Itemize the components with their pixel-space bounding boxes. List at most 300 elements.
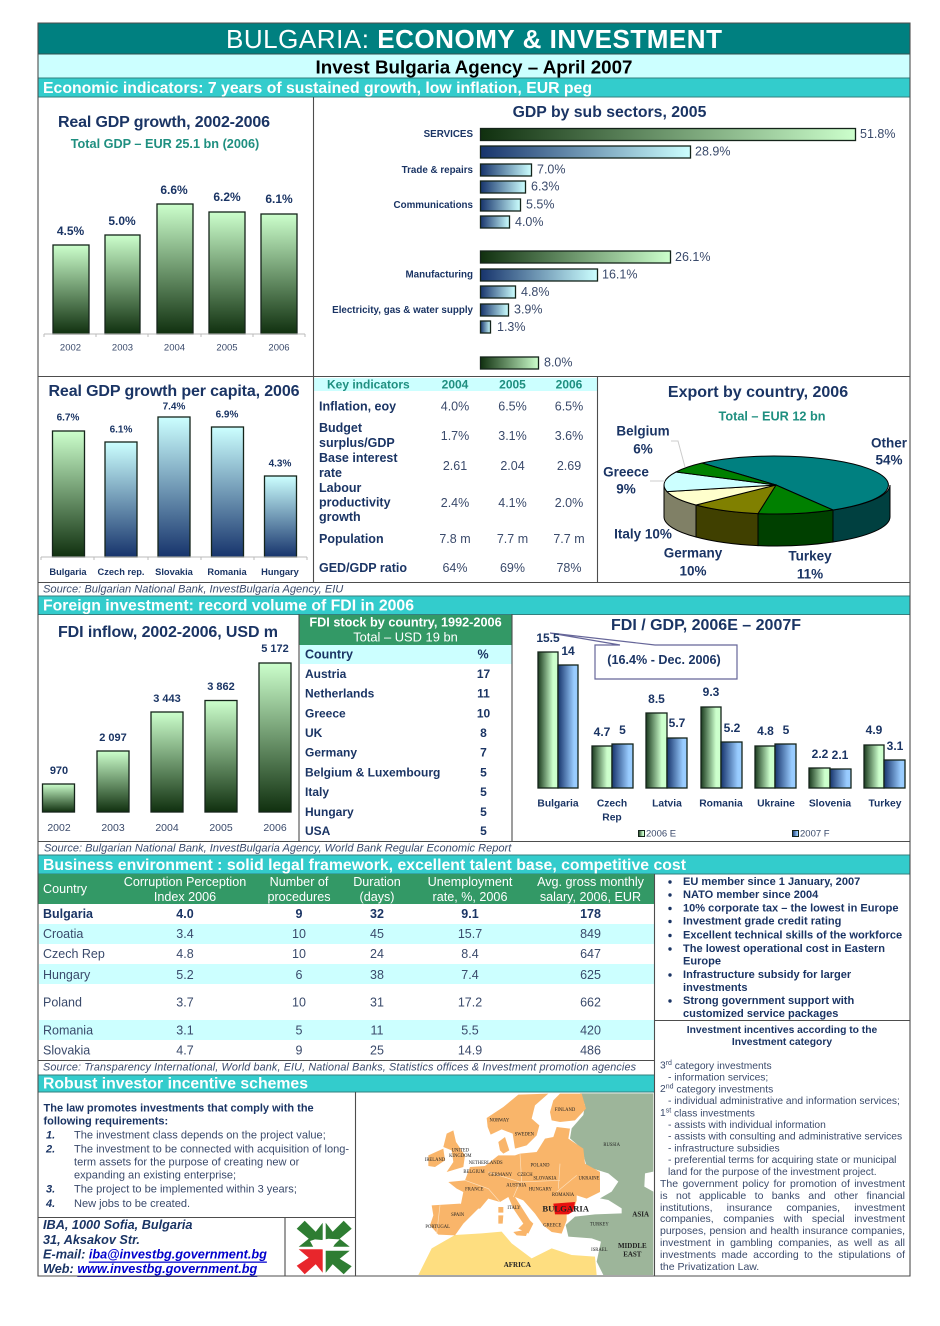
- table header: Duration: [353, 875, 401, 889]
- subtitle: [38, 54, 910, 78]
- requirements list: term assets for the purpose of creating new or: [74, 1156, 300, 1168]
- horizontal bar chart: SERVICES: [424, 129, 473, 140]
- table heading: Total – USD 19 bn: [353, 630, 458, 644]
- table rows: 5: [480, 805, 487, 819]
- header bands: [38, 24, 910, 98]
- table rows: 3.7: [176, 996, 194, 1010]
- table rows: Austria: [305, 667, 347, 681]
- table rows: 4.1%: [498, 496, 527, 510]
- chart title: Real GDP growth per capita, 2006: [48, 383, 300, 400]
- panel: key advantages: Infrastructure subsidy for larger: [683, 969, 852, 981]
- map of Europe: [418, 1093, 654, 1275]
- chart title: FDI inflow, 2002-2006, USD m: [58, 624, 278, 641]
- horizontal bar chart: 51.8%: [860, 127, 895, 141]
- pie labels: Italy 10%: [614, 526, 672, 542]
- table header: rate, %, 2006: [433, 890, 507, 904]
- section heading: business environment: Business environment : solid legal framework, excellent talent base, competitive cost: [43, 857, 687, 874]
- table rows: 3.6%: [555, 429, 583, 443]
- bar chart: GDP growth: 4.5%: [57, 224, 85, 238]
- clustered bar chart: 15.5: [536, 631, 560, 645]
- table rows: 7.4: [461, 968, 479, 982]
- bar chart: FDI inflow: 5 172: [261, 643, 289, 655]
- bar chart: per capita growth: Romania: [207, 567, 247, 577]
- table rows: Population: [319, 532, 384, 546]
- panel: GDP per capita: [40, 383, 308, 577]
- section heading: incentive schemes: [38, 1074, 654, 1092]
- table header: procedures: [267, 890, 331, 904]
- map labels: [425, 1108, 649, 1269]
- bar chart: FDI inflow: 2006: [263, 822, 287, 834]
- panel: investment law requirements: [44, 1102, 349, 1210]
- table rows: Inflation, eoy: [319, 400, 396, 414]
- bar chart: per capita growth: 6.9%: [216, 410, 239, 420]
- table rows: Netherlands: [305, 686, 375, 700]
- section heading: economic indicators: Economic indicators: 7 years of sustained growth, low inflation, EUR peg: [43, 80, 592, 97]
- bar chart: per capita growth: 7.4%: [163, 402, 186, 412]
- title: BULGARIA: ECONOMY & INVESTMENT: [226, 24, 722, 54]
- requirements list: The investment to be connected with acquisition of long-: [74, 1144, 349, 1156]
- table rows: Slovakia: [43, 1044, 90, 1058]
- bar chart: GDP growth: 5.0%: [108, 214, 136, 228]
- legend: 2006 E: [646, 828, 676, 840]
- map labels: GREECE: [543, 1223, 562, 1228]
- requirements list: expanding an existing enterprise;: [74, 1170, 236, 1182]
- table rows: 2.04: [500, 459, 525, 473]
- panel: contact details: [43, 1218, 267, 1277]
- horizontal bar chart: 8.0%: [544, 356, 572, 370]
- table rows: Croatia: [43, 927, 83, 941]
- bar chart: GDP growth: 2005: [216, 342, 238, 354]
- panel: export by country: [603, 384, 908, 582]
- clustered bar chart: 8.5: [648, 692, 665, 706]
- table rows: 17: [477, 667, 490, 681]
- table rows: 4.0%: [441, 400, 469, 414]
- panel: key advantages: The lowest operational cost in Eastern: [683, 943, 885, 955]
- clustered bar chart: 4.9: [866, 723, 883, 737]
- bar chart: per capita growth: Bulgaria: [49, 567, 87, 577]
- panel heading: Investment category: [732, 1037, 832, 1048]
- table rows: 24: [370, 947, 384, 961]
- map labels: HUNGARY: [529, 1187, 552, 1192]
- requirements list: The project to be implemented within 3 years;: [74, 1184, 297, 1196]
- table heading: [299, 615, 512, 645]
- source note: economic indicators: Source: Bulgarian National Bank, InvestBulgaria Agency, EIU: [43, 584, 344, 596]
- map labels: AFRICA: [504, 1261, 531, 1269]
- map labels: ISRAEL: [591, 1248, 608, 1253]
- table rows: surplus/GDP: [319, 436, 395, 450]
- clustered bar chart: Czech: [597, 798, 627, 810]
- source note: business environment: Source: Transparency International, World bank, EIU, National Banks, Statistics offices & Investment promotion agencies: [43, 1062, 637, 1074]
- horizontal bar chart: 1.3%: [497, 320, 526, 334]
- map labels: TURKEY: [590, 1222, 609, 1227]
- table rows: 420: [580, 1024, 601, 1038]
- panel: key advantages: investments: [683, 982, 747, 994]
- pie chart: [664, 456, 890, 546]
- incentive categories: 3: [660, 1060, 666, 1072]
- incentive categories: - infrastructure subsidies: [668, 1144, 780, 1154]
- table rows: Labour: [319, 481, 361, 495]
- bar chart: GDP growth: 6.1%: [265, 192, 293, 206]
- table rows: 7.7 m: [553, 532, 585, 546]
- section heading: foreign investment: [38, 596, 910, 615]
- pie labels: Other: [871, 436, 908, 450]
- bar chart: per capita growth: Hungary: [261, 567, 300, 577]
- table rows: 10: [292, 996, 306, 1010]
- text block: government policy: The government policy for promotion of investment is not applicable to banks and other financial institutions, insurance companies, investment companies, companies with special investment purposes, pension and health insurance companies, investment in gambling companies, as well as all investments made according to the stipulations of the Privatization Law.: [660, 1178, 905, 1273]
- map labels: NORWAY: [489, 1118, 510, 1123]
- table rows: 9.1: [461, 907, 479, 921]
- map labels: RUSSIA: [603, 1143, 621, 1148]
- map labels: POLAND: [531, 1163, 550, 1168]
- bar chart: GDP growth: 2004: [164, 342, 185, 354]
- table rows: 25: [370, 1044, 384, 1058]
- requirements list: New jobs to be created.: [74, 1198, 190, 1210]
- panel: key advantages: Strong government support with: [683, 995, 854, 1007]
- table rows: 1.7%: [441, 429, 469, 443]
- chart title: Total GDP – EUR 25.1 bn (2006): [71, 137, 259, 151]
- panel: key advantages: Investment grade credit rating: [683, 916, 842, 928]
- pie labels: [603, 424, 908, 582]
- table rows: 625: [580, 968, 601, 982]
- pie labels: Germany: [664, 546, 723, 560]
- requirements list: 1.: [46, 1130, 55, 1142]
- table header: Avg. gross monthly: [537, 875, 645, 889]
- horizontal bar chart: 4.0%: [515, 215, 544, 229]
- table rows: 486: [580, 1044, 601, 1058]
- intro text: following requirements:: [44, 1116, 168, 1128]
- table rows: Germany: [305, 746, 357, 760]
- table rows: 5.5: [461, 1024, 479, 1038]
- bar chart: GDP growth: 6.2%: [213, 190, 241, 204]
- map labels: SPAIN: [451, 1213, 465, 1218]
- table header row: %: [477, 648, 489, 662]
- table rows: 6.5%: [555, 400, 583, 414]
- table header: (days): [360, 890, 394, 904]
- table rows: 2.0%: [555, 496, 583, 510]
- clustered bar chart: 14: [561, 644, 575, 658]
- table rows: Hungary: [305, 805, 354, 819]
- table rows: 4.8: [176, 947, 194, 961]
- requirements list: 2.: [45, 1144, 55, 1156]
- Europe: [428, 1094, 600, 1236]
- bar chart: per capita growth: 6.1%: [110, 424, 133, 436]
- table rows: 10: [477, 706, 490, 720]
- table rows: 15.7: [458, 927, 482, 941]
- panel: investment incentives: [660, 1025, 902, 1178]
- panel: key advantages: customized service packages: [683, 1008, 838, 1020]
- table rows: Budget: [319, 421, 363, 435]
- panel: key advantages: 10% corporate tax – the lowest in Europe: [683, 902, 898, 914]
- map labels: BULGARIA: [542, 1203, 590, 1213]
- clustered bar chart: 5: [619, 723, 626, 737]
- map labels: ROMANIA: [552, 1193, 575, 1198]
- table rows: 7.7 m: [497, 532, 528, 546]
- bar chart: FDI inflow: 3 443: [153, 693, 181, 705]
- clustered bar chart: Slovenia: [809, 798, 851, 810]
- horizontal bar chart: 5.5%: [526, 198, 554, 212]
- table rows: 3.1: [176, 1024, 194, 1038]
- table rows: 178: [580, 907, 601, 921]
- map labels: SLOVAKIA: [533, 1176, 557, 1181]
- clustered bar chart: Romania: [699, 798, 743, 810]
- table header: salary, 2006, EUR: [540, 890, 641, 904]
- map labels: FRANCE: [465, 1187, 484, 1192]
- clustered bar chart: 3.1: [887, 739, 904, 753]
- title: [38, 23, 910, 54]
- horizontal bar chart: 7.0%: [537, 162, 566, 176]
- source note: foreign investment: Source: Bulgarian National Bank, InvestBulgaria Agency, World Bank Regular Economic Report: [44, 842, 512, 854]
- horizontal bar chart: Communications: [394, 200, 474, 211]
- table rows: GED/GDP ratio: [319, 561, 407, 575]
- table rows: Romania: [43, 1024, 93, 1038]
- table rows: 4.0: [176, 907, 194, 921]
- panel: real GDP growth: [44, 114, 306, 354]
- table rows: 8: [480, 726, 487, 740]
- bar chart: GDP growth: 2006: [268, 342, 290, 354]
- map labels: AUSTRIA: [506, 1183, 527, 1188]
- callout: [550, 633, 737, 679]
- pie labels: 10%: [679, 564, 707, 578]
- map labels: SWEDEN: [515, 1132, 535, 1137]
- table rows: 4.7: [176, 1044, 194, 1058]
- Bulgaria highlight: [553, 1202, 575, 1214]
- horizontal bar chart: 28.9%: [695, 144, 730, 158]
- horizontal bar chart: 26.1%: [675, 250, 710, 264]
- table rows: Hungary: [43, 968, 91, 982]
- clustered bar chart: 2.2: [812, 747, 829, 761]
- requirements list: The investment class depends on the project value;: [74, 1130, 326, 1142]
- table rows: Base interest: [319, 451, 398, 465]
- table header: 2005: [499, 378, 526, 392]
- table rows: 5: [480, 785, 487, 799]
- clustered bar chart: 5.7: [669, 716, 686, 730]
- clustered bar chart: 9.3: [703, 685, 720, 699]
- table: business environment: [38, 874, 654, 1058]
- table rows: productivity: [319, 496, 391, 510]
- pie labels: 9%: [616, 482, 636, 496]
- table rows: Greece: [305, 706, 346, 720]
- table rows: rate: [319, 466, 342, 480]
- table header: Key indicators: [327, 378, 410, 392]
- panel: key advantages: EU member since 1 January, 2007: [683, 876, 860, 888]
- horizontal bar chart: 4.8%: [521, 285, 550, 299]
- bar chart: GDP growth: 2002: [60, 342, 81, 354]
- panel: contact details: IBA, 1000 Sofia, Bulgaria: [43, 1218, 192, 1232]
- pie labels: 54%: [875, 452, 903, 468]
- section heading: business environment: [38, 854, 910, 874]
- incentive categories: - individual administrative and information services;: [668, 1096, 900, 1107]
- table rows: 11: [371, 1024, 384, 1038]
- bar chart: FDI inflow: [42, 643, 291, 834]
- table rows: 662: [580, 996, 601, 1010]
- table rows: 31: [370, 996, 384, 1010]
- table rows: 5: [296, 1024, 303, 1038]
- table rows: 10: [292, 927, 306, 941]
- table rows: Italy: [305, 785, 329, 799]
- map labels: IRELAND: [425, 1158, 446, 1163]
- table rows: 9: [296, 1044, 303, 1058]
- map labels: UKRAINE: [579, 1176, 600, 1181]
- table header: 2004: [442, 378, 469, 392]
- map labels: ITALY: [507, 1206, 521, 1211]
- table rows: Bulgaria: [43, 907, 94, 921]
- chart title: FDI / GDP, 2006E – 2007F: [611, 617, 801, 634]
- clustered bar chart: 2.1: [832, 748, 849, 762]
- table rows: 69%: [500, 561, 525, 575]
- table rows: 38: [370, 968, 384, 982]
- incentive categories: 2: [660, 1084, 666, 1095]
- table rows: 9: [296, 907, 303, 921]
- intro text: The law promotes investments that comply with the: [44, 1102, 314, 1114]
- clustered bar chart: [536, 631, 905, 824]
- bar chart: FDI inflow: 2002: [47, 822, 71, 834]
- requirements list: 4.: [45, 1198, 55, 1210]
- panel: FDI stock table: [300, 615, 512, 838]
- panel: key advantages: NATO member since 2004: [683, 889, 819, 901]
- map labels: ASIA: [632, 1210, 649, 1218]
- table header: Index 2006: [154, 890, 216, 904]
- panel: contact details: Web: www.investbg.government.bg: [43, 1262, 258, 1276]
- table heading: FDI stock by country, 1992-2006: [309, 616, 502, 630]
- icon: Invest Bulgaria logo: [296, 1220, 352, 1274]
- table rows: 78%: [556, 561, 582, 575]
- bar chart: FDI inflow: 2004: [155, 822, 179, 834]
- legend: 2007 F: [800, 828, 830, 840]
- table header: Number of: [270, 875, 329, 889]
- bar chart: GDP growth: 2003: [112, 342, 133, 354]
- clustered bar chart: 5: [783, 723, 790, 737]
- bar chart: per capita growth: Slovakia: [155, 567, 194, 577]
- bar chart: FDI inflow: 2005: [209, 822, 233, 834]
- chart title: Total – EUR 12 bn: [719, 410, 825, 424]
- table header row: [300, 645, 512, 664]
- bar chart: per capita growth: 6.7%: [57, 412, 80, 424]
- incentive categories: - assists with individual information: [668, 1120, 826, 1131]
- incentive categories: - assists with consulting and administrative services: [668, 1132, 902, 1142]
- incentive categories: nd: [666, 1083, 674, 1090]
- clustered bar chart: Turkey: [868, 798, 902, 810]
- bar chart: FDI inflow: 2003: [101, 822, 125, 834]
- panel: contact details: E-mail: iba@investbg.government.bg: [43, 1248, 267, 1262]
- pie labels: Greece: [603, 464, 649, 480]
- table header: [314, 378, 597, 392]
- section heading: economic indicators: [38, 78, 910, 97]
- incentive categories: 1: [660, 1108, 666, 1119]
- horizontal bar chart: 3.9%: [514, 302, 542, 316]
- panel: FDI / GDP: [536, 617, 906, 840]
- callout: (16.4% - Dec. 2006): [607, 653, 721, 667]
- table rows: 3.4: [176, 927, 194, 941]
- table rows: Poland: [43, 996, 82, 1010]
- incentive categories: class investments: [671, 1108, 755, 1119]
- table rows: 17.2: [458, 996, 482, 1010]
- table rows: 11: [477, 686, 490, 700]
- chart title: [58, 114, 270, 151]
- panel: key indicators table: [314, 378, 597, 575]
- clustered bar chart: 4.7: [594, 725, 611, 739]
- table header: Country: [43, 882, 88, 896]
- table header: Unemployment: [428, 875, 513, 889]
- map labels: NETHERLANDS: [469, 1161, 503, 1166]
- table rows: [39, 907, 654, 1058]
- bar chart: GDP growth: [44, 183, 305, 354]
- table rows: 64%: [442, 561, 468, 575]
- clustered bar chart: Ukraine: [757, 798, 795, 810]
- legend: [638, 828, 830, 840]
- clustered bar chart: Rep: [602, 812, 622, 824]
- map labels: CZECH: [517, 1173, 533, 1178]
- horizontal bar chart: Trade & repairs: [402, 165, 474, 176]
- table header: 2006: [556, 378, 583, 392]
- incentive categories: st: [666, 1107, 671, 1114]
- map labels: KINGDOM: [449, 1154, 472, 1159]
- horizontal bar chart: [332, 127, 895, 370]
- chart title: GDP by sub sectors, 2005: [513, 104, 707, 121]
- table rows: Belgium & Luxembourg: [305, 766, 440, 780]
- horizontal bar chart: Electricity, gas & water supply: [332, 305, 474, 316]
- table rows: 849: [580, 927, 601, 941]
- table rows: 6: [296, 968, 303, 982]
- table rows: 8.4: [461, 947, 479, 961]
- incentive categories: land for the purpose of the investment project.: [668, 1167, 877, 1178]
- table rows: Czech Rep: [43, 947, 105, 961]
- map labels: FINLAND: [555, 1108, 576, 1113]
- table rows: 7.8 m: [439, 532, 471, 546]
- requirements list: [45, 1130, 349, 1210]
- clustered bar chart: Latvia: [652, 798, 682, 810]
- bar chart: per capita growth: Czech rep.: [97, 567, 145, 577]
- pie labels: 6%: [633, 442, 653, 456]
- panel: key advantages: [668, 876, 902, 1020]
- table rows: 3.1%: [498, 429, 527, 443]
- table header: [38, 874, 654, 904]
- incentive categories: category investments: [674, 1084, 773, 1095]
- table header: Corruption Perception: [124, 875, 246, 889]
- table rows: 7: [480, 746, 487, 760]
- requirements list: 3.: [46, 1184, 55, 1196]
- map labels: PORTUGAL: [425, 1225, 450, 1230]
- panel heading: [687, 1025, 878, 1048]
- table rows: USA: [305, 824, 331, 838]
- chart title: [668, 384, 848, 424]
- table rows: 14.9: [458, 1044, 482, 1058]
- table rows: 5: [480, 824, 487, 838]
- table rows: 2.61: [443, 459, 467, 473]
- bar chart: FDI inflow: 2 097: [99, 732, 127, 744]
- horizontal bar chart: 16.1%: [602, 268, 637, 282]
- pie labels: Turkey: [788, 548, 832, 564]
- table rows: 10: [292, 947, 306, 961]
- panel: GDP by sub sectors: [332, 104, 896, 370]
- panel: contact details: 31, Aksakov Str.: [43, 1233, 140, 1247]
- incentive categories: - preferential terms for acquiring state or municipal: [668, 1155, 896, 1166]
- Russia and Asia: [566, 1093, 653, 1275]
- table rows: growth: [319, 510, 361, 524]
- table rows: 647: [580, 947, 601, 961]
- panel: FDI inflow: [42, 624, 292, 834]
- table header row: Country: [305, 648, 353, 662]
- panel: key advantages: Europe: [683, 956, 721, 968]
- section heading: incentive schemes: Robust investor incentive schemes: [43, 1076, 308, 1092]
- intro text: [44, 1102, 314, 1128]
- table rows: 2.69: [557, 459, 581, 473]
- subtitle: Invest Bulgaria Agency – April 2007: [316, 56, 632, 78]
- panel heading: Investment incentives according to the: [687, 1025, 878, 1036]
- table rows: 5.2: [176, 968, 194, 982]
- clustered bar chart: 4.8: [757, 724, 774, 738]
- incentive categories: - information services;: [668, 1072, 768, 1084]
- chart title: Export by country, 2006: [668, 384, 848, 401]
